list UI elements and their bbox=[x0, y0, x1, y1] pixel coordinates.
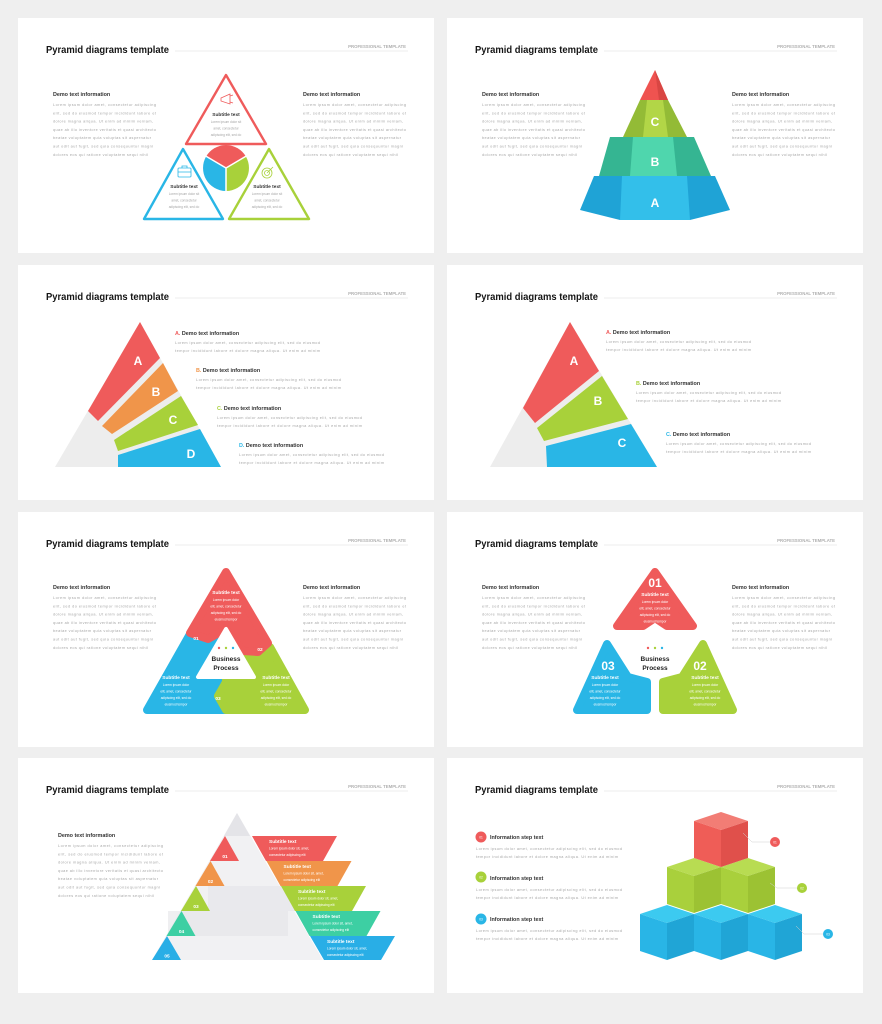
header bbox=[46, 44, 408, 56]
left text block: Demo text information bbox=[53, 92, 110, 98]
right text block: Lorem ipsum dolor amet, consectetur adipiscing bbox=[303, 103, 406, 107]
pyramid ABCD bbox=[55, 322, 221, 467]
left text block: quae ab illo inventore veritatis et quasi architecto bbox=[482, 621, 585, 625]
icon: megaphone bbox=[221, 94, 233, 104]
triangle pieces: elit, amet, consectetur bbox=[589, 690, 622, 694]
header: PROFESSIONAL TEMPLATE bbox=[777, 538, 835, 543]
triangle diagram: elit, amet, consectetur bbox=[210, 604, 243, 608]
text B: B. Demo text information bbox=[196, 368, 260, 374]
pyramid ABC: B bbox=[594, 394, 603, 408]
banner 01: consectetur adipiscing elit bbox=[269, 853, 306, 857]
pyramid chart: C bbox=[651, 115, 660, 129]
triangle diagram: Subtitle text bbox=[162, 675, 190, 681]
right text block: quae ab illo inventore veritatis et quasi architecto bbox=[303, 621, 406, 625]
triangle diagram: 01 bbox=[193, 636, 199, 642]
right text block: quae ab illo inventore veritatis et quasi architecto bbox=[732, 621, 835, 625]
step 1: Lorem ipsum dolor amet, consectetur adipiscing elit, sed do eiusmod bbox=[476, 847, 622, 851]
header: Pyramid diagrams template bbox=[475, 538, 598, 550]
triangle pieces: adipiscing elit, sed do bbox=[690, 696, 720, 700]
header bbox=[475, 538, 837, 550]
text D: Lorem ipsum dolor amet, consectetur adipiscing elit, sed do eiusmod bbox=[239, 453, 384, 457]
icon: target bbox=[262, 167, 273, 178]
text B: B. Demo text information bbox=[636, 381, 700, 387]
triangle pieces: elit, amet, consectetur bbox=[689, 690, 722, 694]
text B bbox=[196, 368, 341, 390]
pyramid ABCD: D bbox=[187, 447, 196, 461]
triangle diagram: Lorem ipsum dolor sit bbox=[252, 192, 282, 196]
header: PROFESSIONAL TEMPLATE bbox=[348, 538, 406, 543]
left text block: beatae voluptatem quia voluptas sit aspernatur bbox=[53, 136, 152, 140]
slide 2: 3D layered pyramid bbox=[447, 18, 863, 253]
text B: tempor incididunt labore et dolore magna aliqua. Ut enim ad minim bbox=[636, 399, 781, 403]
text A: A. Demo text information bbox=[175, 331, 239, 337]
triangle pieces: adipiscing elit, sed do bbox=[640, 613, 670, 617]
right text block: dolore magna aliqua. Ut enim ad minim veniam, bbox=[303, 613, 403, 617]
triangle pieces: Subtitle text bbox=[591, 675, 619, 681]
triangle pieces: adipiscing elit, sed do bbox=[590, 696, 620, 700]
left text block: aut odit aut fugit, sed quia consequuntur magni bbox=[482, 144, 582, 148]
left text block: Lorem ipsum dolor amet, consectetur adipiscing bbox=[482, 103, 585, 107]
left text block: dolore magna aliqua. Ut enim ad minim veniam, bbox=[58, 861, 160, 865]
slide 5: business process triangle bbox=[18, 512, 434, 747]
banner 03: Lorem ipsum dolor sit, amet, bbox=[298, 896, 338, 900]
right text block bbox=[732, 92, 836, 157]
text A: tempor incididunt labore et dolore magna aliqua. Ut enim ad minim bbox=[175, 349, 320, 353]
text C: C. Demo text information bbox=[217, 406, 281, 412]
banner 03: consectetur adipiscing elit bbox=[298, 903, 335, 907]
right text block bbox=[303, 585, 407, 650]
banner 01: Lorem ipsum dolor sit, amet, bbox=[269, 846, 309, 850]
text D bbox=[239, 443, 384, 465]
left text block bbox=[482, 92, 586, 157]
stepped pyramid: 04 bbox=[179, 929, 184, 935]
pyramid chart: A bbox=[651, 196, 660, 210]
text C: Lorem ipsum dolor amet, consectetur adipiscing elit, sed do eiusmod bbox=[666, 442, 811, 446]
left text block: Demo text information bbox=[53, 585, 110, 591]
cube stack bbox=[640, 812, 802, 960]
left text block: elit, sed do eiusmod tempor incididunt labore et bbox=[482, 604, 586, 608]
left text block: dolores eos qui ratione voluptatem sequi nihil bbox=[482, 646, 577, 650]
header: Pyramid diagrams template bbox=[46, 44, 169, 56]
left text block: dolore magna aliqua. Ut enim ad minim veniam, bbox=[53, 613, 153, 617]
step 3: 03 bbox=[479, 918, 483, 922]
right text block: dolores eos qui ratione voluptatem sequi nihil bbox=[303, 646, 398, 650]
triangle pieces: elit, amet, consectetur bbox=[639, 606, 672, 610]
text B bbox=[636, 381, 781, 403]
left text block: Lorem ipsum dolor amet, consectetur adipiscing bbox=[53, 103, 156, 107]
left text block: dolore magna aliqua. Ut enim ad minim veniam, bbox=[53, 120, 153, 124]
step 1: Information step text bbox=[490, 835, 544, 841]
right text block: beatae voluptatem quia voluptas sit aspernatur bbox=[732, 629, 831, 633]
triangle pieces: eiusmod tempor bbox=[594, 702, 617, 706]
text A: Lorem ipsum dolor amet, consectetur adipiscing elit, sed do eiusmod bbox=[175, 341, 320, 345]
triangle pieces: Lorem ipsum dolor bbox=[642, 600, 669, 604]
left text block: aut odit aut fugit, sed quia consequuntur magni bbox=[53, 638, 153, 642]
right text block: aut odit aut fugit, sed quia consequuntur magni bbox=[303, 638, 403, 642]
triangle diagram: Lorem ipsum dolor bbox=[213, 598, 240, 602]
left text block bbox=[53, 92, 157, 157]
stepped pyramid: 05 bbox=[164, 954, 170, 960]
right text block: Demo text information bbox=[732, 585, 789, 591]
triangle pieces bbox=[577, 572, 733, 710]
header bbox=[475, 784, 837, 796]
stepped pyramid: 02 bbox=[208, 879, 213, 885]
pyramid chart bbox=[580, 70, 730, 220]
slide 8: stacked cubes: 02 bbox=[800, 886, 804, 890]
triangle pieces: 03 bbox=[601, 659, 615, 673]
triangle pieces: 02 bbox=[693, 659, 707, 673]
text A: A. Demo text information bbox=[606, 330, 670, 336]
left text block: Lorem ipsum dolor amet, consectetur adipiscing bbox=[482, 596, 585, 600]
header bbox=[475, 291, 837, 303]
triangle diagram: amet, consectetur bbox=[254, 198, 281, 202]
banner 05: Subtitle text bbox=[327, 939, 355, 945]
pyramid chart: B bbox=[651, 155, 660, 169]
right text block: Lorem ipsum dolor amet, consectetur adipiscing bbox=[732, 596, 835, 600]
text A bbox=[175, 331, 320, 353]
header: PROFESSIONAL TEMPLATE bbox=[348, 44, 406, 49]
pyramid ABCD: B bbox=[152, 385, 161, 399]
triangle diagram: Business bbox=[212, 656, 241, 663]
triangle pieces: 01 bbox=[648, 576, 662, 590]
slide 8: stacked cubes: 03 bbox=[826, 932, 830, 936]
triangle pieces: Process bbox=[642, 665, 668, 672]
right text block: Demo text information bbox=[732, 92, 789, 98]
banner 05 bbox=[310, 936, 395, 960]
banner 03 bbox=[281, 886, 366, 911]
left text block: Lorem ipsum dolor amet, consectetur adipiscing bbox=[53, 596, 156, 600]
right text block: elit, sed do eiusmod tempor incididunt labore et bbox=[303, 111, 407, 115]
left text block: aut odit aut fugit, sed quia consequuntur magni bbox=[482, 638, 582, 642]
triangle diagram: Subtitle text bbox=[212, 590, 240, 596]
left text block: quae ab illo inventore veritatis et quasi architecto bbox=[53, 621, 156, 625]
banner 02: Lorem ipsum dolor sit, amet, bbox=[284, 872, 324, 876]
banner 04: Subtitle text bbox=[312, 914, 340, 920]
header: PROFESSIONAL TEMPLATE bbox=[777, 784, 835, 789]
slide 8: stacked cubes: 01 bbox=[773, 840, 777, 844]
step 3: tempor incididunt labore et dolore magna aliqua. Ut enim ad minim bbox=[476, 937, 618, 941]
left text block bbox=[53, 585, 157, 650]
triangle diagram: elit, amet, consectetur bbox=[160, 690, 193, 694]
right text block: quae ab illo inventore veritatis et quasi architecto bbox=[732, 128, 835, 132]
header: Pyramid diagrams template bbox=[46, 784, 169, 796]
text C: C. Demo text information bbox=[666, 432, 730, 438]
banner 04 bbox=[296, 911, 380, 936]
text D: D. Demo text information bbox=[239, 443, 303, 449]
left text block: quae ab illo inventore veritatis et quasi architecto bbox=[53, 128, 156, 132]
text C: tempor incididunt labore et dolore magna aliqua. Ut enim ad minim bbox=[666, 450, 811, 454]
header: Pyramid diagrams template bbox=[475, 44, 598, 56]
banner 02: consectetur adipiscing elit bbox=[284, 878, 320, 882]
triangle pieces: Subtitle text bbox=[641, 592, 669, 598]
header: PROFESSIONAL TEMPLATE bbox=[348, 784, 406, 789]
step 3: Lorem ipsum dolor amet, consectetur adipiscing elit, sed do eiusmod bbox=[476, 929, 622, 933]
slide 7: stepped pyramid with banners bbox=[18, 758, 434, 993]
right text block: aut odit aut fugit, sed quia consequuntur magni bbox=[732, 638, 832, 642]
banner 04: consectetur adipiscing elit bbox=[312, 928, 349, 932]
triangle diagram: Lorem ipsum dolor sit bbox=[211, 120, 241, 124]
left text block: Demo text information bbox=[58, 833, 115, 839]
left text block: dolores eos qui ratione voluptatem sequi nihil bbox=[482, 153, 577, 157]
banner 05: consectetur adipiscing elit bbox=[327, 953, 364, 957]
left text block: quae ab illo inventore veritatis et quasi architecto bbox=[482, 128, 585, 132]
left text block: dolores eos qui ratione voluptatem sequi nihil bbox=[53, 646, 148, 650]
header: Pyramid diagrams template bbox=[475, 784, 598, 796]
step 2: tempor incididunt labore et dolore magna aliqua. Ut enim ad minim bbox=[476, 896, 618, 900]
triangle pieces: Lorem ipsum dolor bbox=[592, 683, 619, 687]
header: Pyramid diagrams template bbox=[46, 291, 169, 303]
step 2: Lorem ipsum dolor amet, consectetur adipiscing elit, sed do eiusmod bbox=[476, 888, 622, 892]
banner 05: Lorem ipsum dolor sit, amet, bbox=[327, 946, 367, 950]
left text block: dolores eos qui ratione voluptatem sequi nihil bbox=[53, 153, 148, 157]
left text block: quae ab illo inventore veritatis et quasi architecto bbox=[58, 869, 163, 873]
banner 02: Subtitle text bbox=[284, 864, 311, 870]
stepped pyramid: 03 bbox=[193, 904, 199, 910]
left text block: dolore magna aliqua. Ut enim ad minim veniam, bbox=[482, 613, 582, 617]
left text block bbox=[58, 833, 164, 898]
header: PROFESSIONAL TEMPLATE bbox=[777, 291, 835, 296]
left text block: elit, sed do eiusmod tempor incididunt labore et bbox=[482, 111, 586, 115]
left text block: beatae voluptatem quia voluptas sit aspernatur bbox=[53, 629, 152, 633]
header bbox=[46, 291, 408, 303]
triangle diagram: 03 bbox=[215, 696, 221, 702]
stepped pyramid bbox=[152, 813, 395, 960]
right text block: beatae voluptatem quia voluptas sit aspernatur bbox=[303, 136, 402, 140]
triangle diagram: Subtitle text bbox=[170, 184, 198, 190]
right text block: dolores eos qui ratione voluptatem sequi nihil bbox=[732, 646, 827, 650]
left text block: elit, sed do eiusmod tempor incididunt labore et bbox=[58, 852, 164, 856]
banner 03: Subtitle text bbox=[298, 889, 326, 895]
triangle pieces: Lorem ipsum dolor bbox=[692, 683, 719, 687]
step 3: Information step text bbox=[490, 917, 544, 923]
header: Pyramid diagrams template bbox=[475, 291, 598, 303]
triangle diagram: adipiscing elit, sed do bbox=[252, 205, 282, 209]
triangle diagram: Lorem ipsum dolor sit bbox=[169, 192, 199, 196]
left text block: beatae voluptatem quia voluptas sit aspernatur bbox=[482, 629, 581, 633]
left text block: Lorem ipsum dolor amet, consectetur adipiscing bbox=[58, 844, 163, 848]
triangle diagram: Process bbox=[213, 665, 239, 672]
right text block bbox=[303, 92, 407, 157]
header bbox=[475, 44, 837, 56]
left text block: aut odit aut fugit, sed quia consequuntur magni bbox=[53, 144, 153, 148]
slide 1: triangle with circle bbox=[18, 18, 434, 253]
left text block: dolore magna aliqua. Ut enim ad minim veniam, bbox=[482, 120, 582, 124]
triangle diagram: eiusmod tempor bbox=[165, 702, 188, 706]
triangle pieces: Subtitle text bbox=[691, 675, 719, 681]
triangle diagram: elit, amet, consectetur bbox=[260, 690, 293, 694]
left text block: Demo text information bbox=[482, 92, 539, 98]
banner 01 bbox=[252, 836, 337, 861]
text B: Lorem ipsum dolor amet, consectetur adipiscing elit, sed do eiusmod bbox=[196, 378, 341, 382]
stepped pyramid: 01 bbox=[222, 854, 228, 860]
pyramid ABCD: A bbox=[134, 354, 143, 368]
slide 4: ABC side pyramid bbox=[447, 265, 863, 500]
right text block: aut odit aut fugit, sed quia consequuntur magni bbox=[732, 144, 832, 148]
slide 6: separated process triangle bbox=[447, 512, 863, 747]
right text block: quae ab illo inventore veritatis et quasi architecto bbox=[303, 128, 406, 132]
pyramid ABCD: C bbox=[169, 413, 178, 427]
callouts bbox=[743, 833, 823, 934]
text D: tempor incididunt labore et dolore magna aliqua. Ut enim ad minim bbox=[239, 461, 384, 465]
left text block: dolores eos qui ratione voluptatem sequi nihil bbox=[58, 894, 154, 898]
triangle diagram: Subtitle text bbox=[212, 112, 240, 118]
triangle diagram: Lorem ipsum dolor bbox=[263, 683, 290, 687]
step 3 bbox=[476, 914, 622, 941]
header bbox=[46, 538, 408, 550]
step 1: tempor incididunt labore et dolore magna aliqua. Ut enim ad minim bbox=[476, 855, 618, 859]
right text block: dolore magna aliqua. Ut enim ad minim veniam, bbox=[732, 613, 832, 617]
triangle diagram: Subtitle text bbox=[262, 675, 290, 681]
pyramid ABC bbox=[490, 322, 657, 467]
text C bbox=[217, 406, 362, 428]
pyramid ABC: C bbox=[618, 436, 627, 450]
banner 02 bbox=[266, 861, 352, 886]
right text block: dolore magna aliqua. Ut enim ad minim veniam, bbox=[732, 120, 832, 124]
triangle diagram: amet, consectetur bbox=[171, 198, 198, 202]
step 1: 01 bbox=[479, 836, 483, 840]
slide 3: ABCD side pyramid bbox=[18, 265, 434, 500]
left text block: aut odit aut fugit, sed quia consequuntur magni bbox=[58, 886, 160, 890]
step 1 bbox=[476, 832, 622, 859]
right text block: Lorem ipsum dolor amet, consectetur adipiscing bbox=[303, 596, 406, 600]
right text block: Demo text information bbox=[303, 92, 360, 98]
right text block: Demo text information bbox=[303, 585, 360, 591]
right text block: elit, sed do eiusmod tempor incididunt labore et bbox=[303, 604, 407, 608]
triangle diagram bbox=[147, 572, 305, 710]
right text block: Lorem ipsum dolor amet, consectetur adipiscing bbox=[732, 103, 835, 107]
triangle diagram bbox=[144, 75, 309, 219]
right text block: beatae voluptatem quia voluptas sit aspernatur bbox=[732, 136, 831, 140]
right text block: aut odit aut fugit, sed quia consequuntur magni bbox=[303, 144, 403, 148]
text C: Lorem ipsum dolor amet, consectetur adipiscing elit, sed do eiusmod bbox=[217, 416, 362, 420]
right text block bbox=[732, 585, 836, 650]
text A: tempor incididunt labore et dolore magna aliqua. Ut enim ad minim bbox=[606, 348, 751, 352]
triangle diagram: Lorem ipsum dolor bbox=[163, 683, 190, 687]
header: PROFESSIONAL TEMPLATE bbox=[348, 291, 406, 296]
triangle diagram: adipiscing elit, sed do bbox=[261, 696, 291, 700]
triangle diagram: adipiscing elit, sed do bbox=[211, 133, 241, 137]
header bbox=[46, 784, 408, 796]
left text block: elit, sed do eiusmod tempor incididunt labore et bbox=[53, 604, 157, 608]
triangle pieces: eiusmod tempor bbox=[694, 702, 717, 706]
triangle pieces: Business bbox=[641, 656, 670, 663]
banner 01: Subtitle text bbox=[269, 839, 297, 845]
left text block: Demo text information bbox=[482, 585, 539, 591]
triangle diagram: adipiscing elit, sed do bbox=[161, 696, 191, 700]
right text block: dolores eos qui ratione voluptatem sequi nihil bbox=[303, 153, 398, 157]
step 2 bbox=[476, 872, 622, 900]
triangle diagram: 02 bbox=[257, 647, 263, 653]
triangle diagram: adipiscing elit, sed do bbox=[169, 205, 199, 209]
text B: tempor incididunt labore et dolore magna aliqua. Ut enim ad minim bbox=[196, 386, 341, 390]
triangle diagram: eiusmod tempor bbox=[215, 618, 238, 622]
text C bbox=[666, 432, 811, 454]
banner 04: Lorem ipsum dolor sit, amet, bbox=[312, 922, 353, 926]
pyramid ABC: A bbox=[570, 354, 579, 368]
right text block: elit, sed do eiusmod tempor incididunt labore et bbox=[732, 604, 836, 608]
right text block: elit, sed do eiusmod tempor incididunt labore et bbox=[732, 111, 836, 115]
text A bbox=[606, 330, 751, 352]
icon: briefcase bbox=[178, 166, 191, 177]
left text block: beatae voluptatem quia voluptas sit aspernatur bbox=[482, 136, 581, 140]
step 2: Information step text bbox=[490, 876, 544, 882]
slide 8: stacked cubes bbox=[447, 758, 863, 993]
triangle diagram: Subtitle text bbox=[253, 184, 281, 190]
header: PROFESSIONAL TEMPLATE bbox=[777, 44, 835, 49]
triangle pieces: eiusmod tempor bbox=[644, 620, 667, 624]
header: Pyramid diagrams template bbox=[46, 538, 169, 550]
triangle diagram: eiusmod tempor bbox=[265, 702, 288, 706]
right text block: beatae voluptatem quia voluptas sit aspernatur bbox=[303, 629, 402, 633]
triangle diagram: amet, consectetur bbox=[213, 126, 240, 130]
left text block: elit, sed do eiusmod tempor incididunt labore et bbox=[53, 111, 157, 115]
text B: Lorem ipsum dolor amet, consectetur adipiscing elit, sed do eiusmod bbox=[636, 391, 781, 395]
left text block bbox=[482, 585, 586, 650]
triangle diagram: adipiscing elit, sed do bbox=[211, 611, 241, 615]
left text block: beatae voluptatem quia voluptas sit aspernatur bbox=[58, 877, 159, 881]
text A: Lorem ipsum dolor amet, consectetur adipiscing elit, sed do eiusmod bbox=[606, 340, 751, 344]
right text block: dolores eos qui ratione voluptatem sequi nihil bbox=[732, 153, 827, 157]
text C: tempor incididunt labore et dolore magna aliqua. Ut enim ad minim bbox=[217, 424, 362, 428]
right text block: dolore magna aliqua. Ut enim ad minim veniam, bbox=[303, 120, 403, 124]
step 2: 02 bbox=[479, 876, 483, 880]
